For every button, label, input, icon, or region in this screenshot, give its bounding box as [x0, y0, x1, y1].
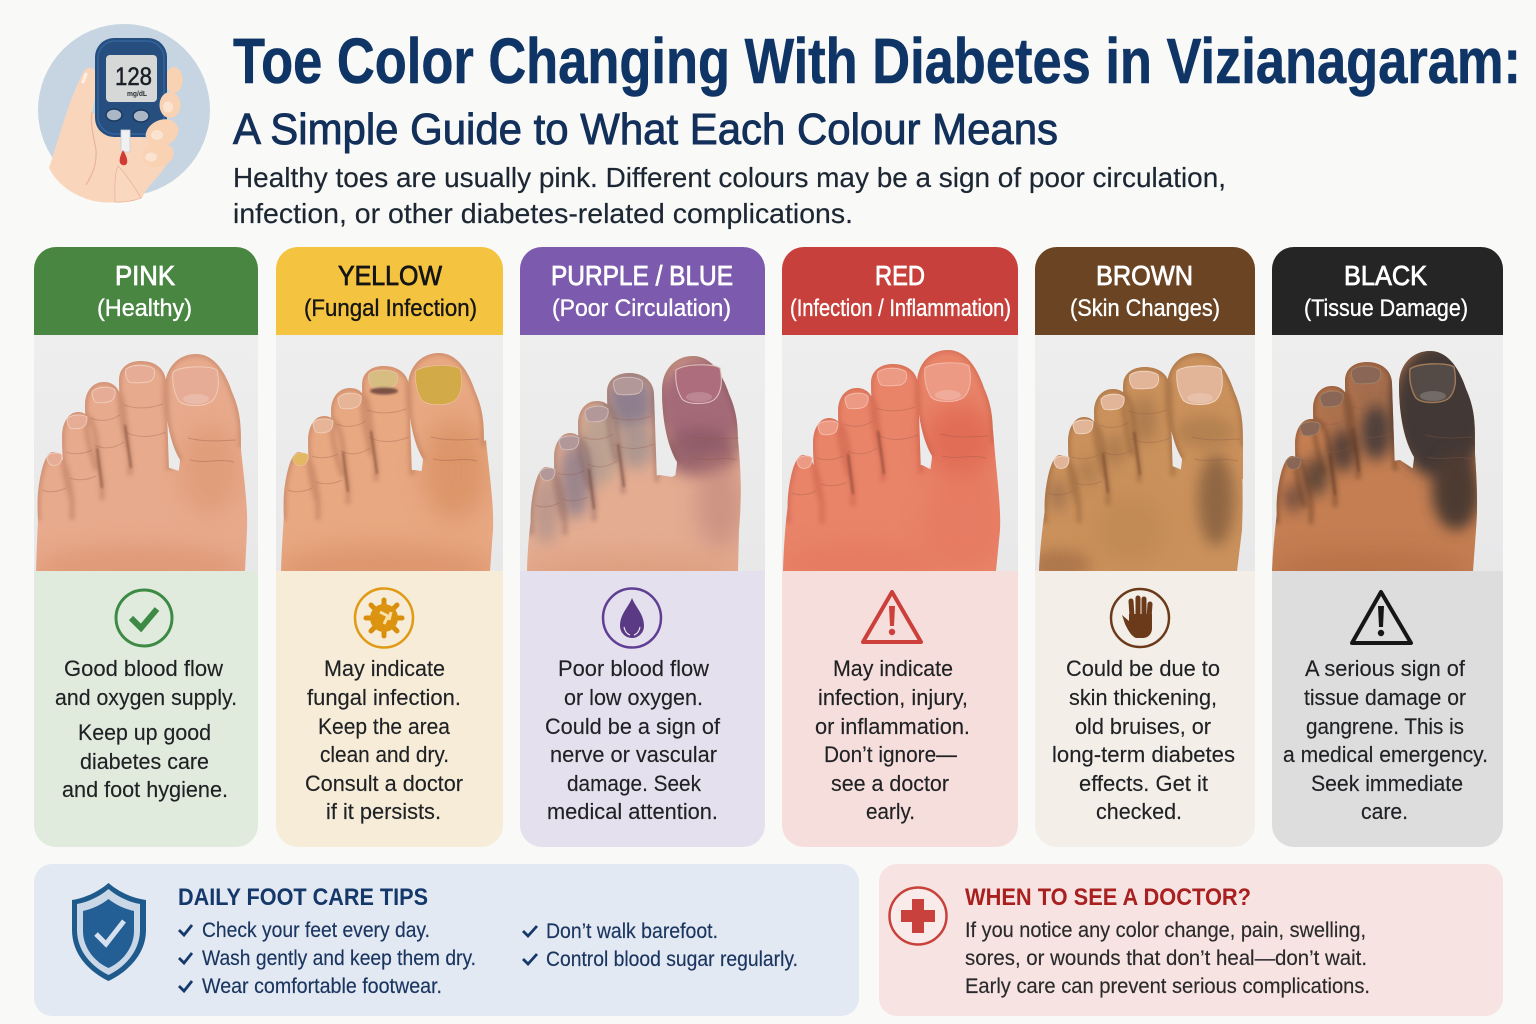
heading: DAILY FOOT CARE TIPS — [178, 884, 428, 911]
description: diabetes care — [80, 749, 209, 774]
description: A serious sign of — [1305, 656, 1466, 681]
subtitle: A Simple Guide to What Each Colour Means — [233, 105, 1058, 154]
tips list left — [179, 919, 476, 998]
description: May indicate — [833, 656, 953, 681]
description: Poor blood flow — [558, 656, 709, 681]
foot photo background — [1272, 335, 1503, 571]
panel: brown — [1030, 247, 1255, 847]
description: Could be due to — [1066, 656, 1220, 681]
yellow big nail — [416, 366, 461, 404]
description: tissue damage or — [1304, 685, 1466, 710]
description: nerve or vascular — [550, 742, 717, 767]
foot: black tissue damage — [1272, 351, 1478, 571]
header text: (Fungal Infection) — [304, 295, 477, 322]
description: if it persists. — [326, 799, 441, 824]
card body — [782, 571, 1018, 847]
advice text — [965, 919, 1370, 998]
description: checked. — [1096, 799, 1182, 824]
description: Consult a doctor — [305, 771, 463, 796]
description: infection, injury, — [818, 685, 968, 710]
description: clean and dry. — [320, 742, 449, 767]
description: old bruises, or — [1075, 714, 1211, 739]
icon: hand holding glucose meter — [38, 24, 210, 203]
description: long-term diabetes — [1052, 742, 1235, 767]
description: or inflammation. — [815, 714, 970, 739]
description: a medical emergency. — [1283, 742, 1488, 767]
tips list left: Check your feet every day. — [202, 919, 430, 942]
description: Don’t ignore— — [824, 742, 957, 767]
card body — [520, 571, 765, 847]
panel: daily foot care tips — [34, 864, 859, 1016]
header text: YELLOW — [338, 260, 443, 291]
header — [782, 247, 1018, 335]
panel: red — [780, 247, 1018, 847]
heading: WHEN TO SEE A DOCTOR? — [965, 884, 1251, 911]
panel: yellow — [275, 247, 503, 847]
description: and oxygen supply. — [55, 685, 237, 710]
tips list left: Wash gently and keep them dry. — [202, 947, 476, 970]
description: see a doctor — [831, 771, 949, 796]
foot photo background — [520, 335, 765, 571]
header text: BLACK — [1344, 260, 1427, 291]
blackened big nail — [1410, 364, 1473, 459]
advice text: sores, or wounds that don’t heal—don’t wait. — [965, 947, 1367, 970]
icon: hand holding glucose meter: mg/dL — [127, 91, 148, 98]
description: May indicate — [324, 656, 445, 681]
header text — [304, 260, 477, 322]
card body — [1272, 571, 1503, 847]
header — [1035, 247, 1255, 335]
description: Seek immediate — [1311, 771, 1463, 796]
header — [276, 247, 503, 335]
tips list right: Control blood sugar regularly. — [546, 948, 798, 971]
description — [55, 656, 237, 802]
header text — [790, 260, 1011, 322]
description: Keep up good — [78, 720, 211, 745]
icon: hand holding glucose meter: 128 — [115, 63, 152, 91]
foot: brown skin changes — [1039, 353, 1243, 571]
intro text: infection, or other diabetes-related complications. — [233, 198, 853, 229]
header text: (Poor Circulation) — [552, 295, 731, 322]
header text: PINK — [115, 260, 175, 291]
tips list right: Don’t walk barefoot. — [546, 920, 718, 943]
description: skin thickening, — [1069, 685, 1217, 710]
header text: (Infection / Inflammation) — [790, 295, 1011, 322]
description: medical attention. — [547, 799, 718, 824]
panel: black — [1270, 247, 1503, 847]
foot: red inflamed — [783, 350, 1000, 571]
header text: (Healthy) — [97, 295, 192, 322]
foot photo background — [782, 335, 1018, 571]
tips list right — [523, 920, 798, 971]
description: Keep the area — [318, 714, 451, 739]
foot: healthy pink — [36, 354, 248, 571]
header text — [1070, 260, 1220, 322]
mauve big nail — [676, 365, 739, 460]
description: fungal infection. — [307, 685, 461, 710]
advice text: If you notice any color change, pain, swelling, — [965, 919, 1366, 942]
icon: black warning — [1352, 592, 1411, 643]
tips list left: Wear comfortable footwear. — [202, 975, 442, 998]
header text: BROWN — [1096, 260, 1193, 291]
description — [1052, 656, 1235, 824]
panel: when to see a doctor — [879, 864, 1503, 1016]
header — [1272, 247, 1503, 335]
icon: fungus — [355, 588, 413, 648]
description — [545, 656, 721, 824]
card body — [34, 571, 258, 847]
description: early. — [866, 799, 915, 824]
intro text: Healthy toes are usually pink. Different colours may be a sign of poor circulation, — [233, 162, 1226, 193]
description: and foot hygiene. — [62, 777, 228, 802]
panel: pink — [30, 247, 260, 847]
header text: RED — [875, 260, 925, 291]
icon: shield — [72, 883, 146, 981]
header — [34, 247, 258, 335]
description: effects. Get it — [1079, 771, 1208, 796]
icon: medical cross — [890, 888, 946, 944]
card body — [276, 571, 503, 847]
advice text: Early care can prevent serious complications. — [965, 975, 1370, 998]
description: damage. Seek — [567, 771, 702, 796]
icon: green check — [116, 590, 172, 646]
foot photo background — [34, 335, 258, 571]
header text: (Skin Changes) — [1070, 295, 1220, 322]
panel: purple / blue — [520, 247, 765, 847]
description: or low oxygen. — [564, 685, 703, 710]
description: gangrene. This is — [1306, 714, 1464, 739]
discoloured second nail — [369, 370, 398, 394]
yellow small nail — [293, 453, 308, 465]
description — [815, 656, 970, 824]
foot photo background — [1035, 335, 1255, 571]
header text — [1304, 260, 1468, 322]
description — [305, 656, 463, 824]
header text: PURPLE / BLUE — [551, 260, 733, 291]
icon: blood drop — [603, 588, 661, 648]
icon: red warning — [863, 592, 921, 642]
card body — [1035, 571, 1255, 847]
icon: stop hand — [1111, 589, 1169, 647]
intro text — [233, 162, 1226, 229]
header text — [97, 260, 192, 322]
foot: purple blue toes — [527, 356, 741, 571]
header — [520, 247, 765, 335]
description — [1283, 656, 1488, 824]
description: care. — [1361, 799, 1408, 824]
description: Could be a sign of — [545, 714, 721, 739]
header text: (Tissue Damage) — [1304, 295, 1468, 322]
description: Good blood flow — [64, 656, 223, 681]
foot photo background — [276, 335, 503, 571]
header text — [551, 260, 733, 322]
foot: yellow nails — [281, 353, 494, 571]
